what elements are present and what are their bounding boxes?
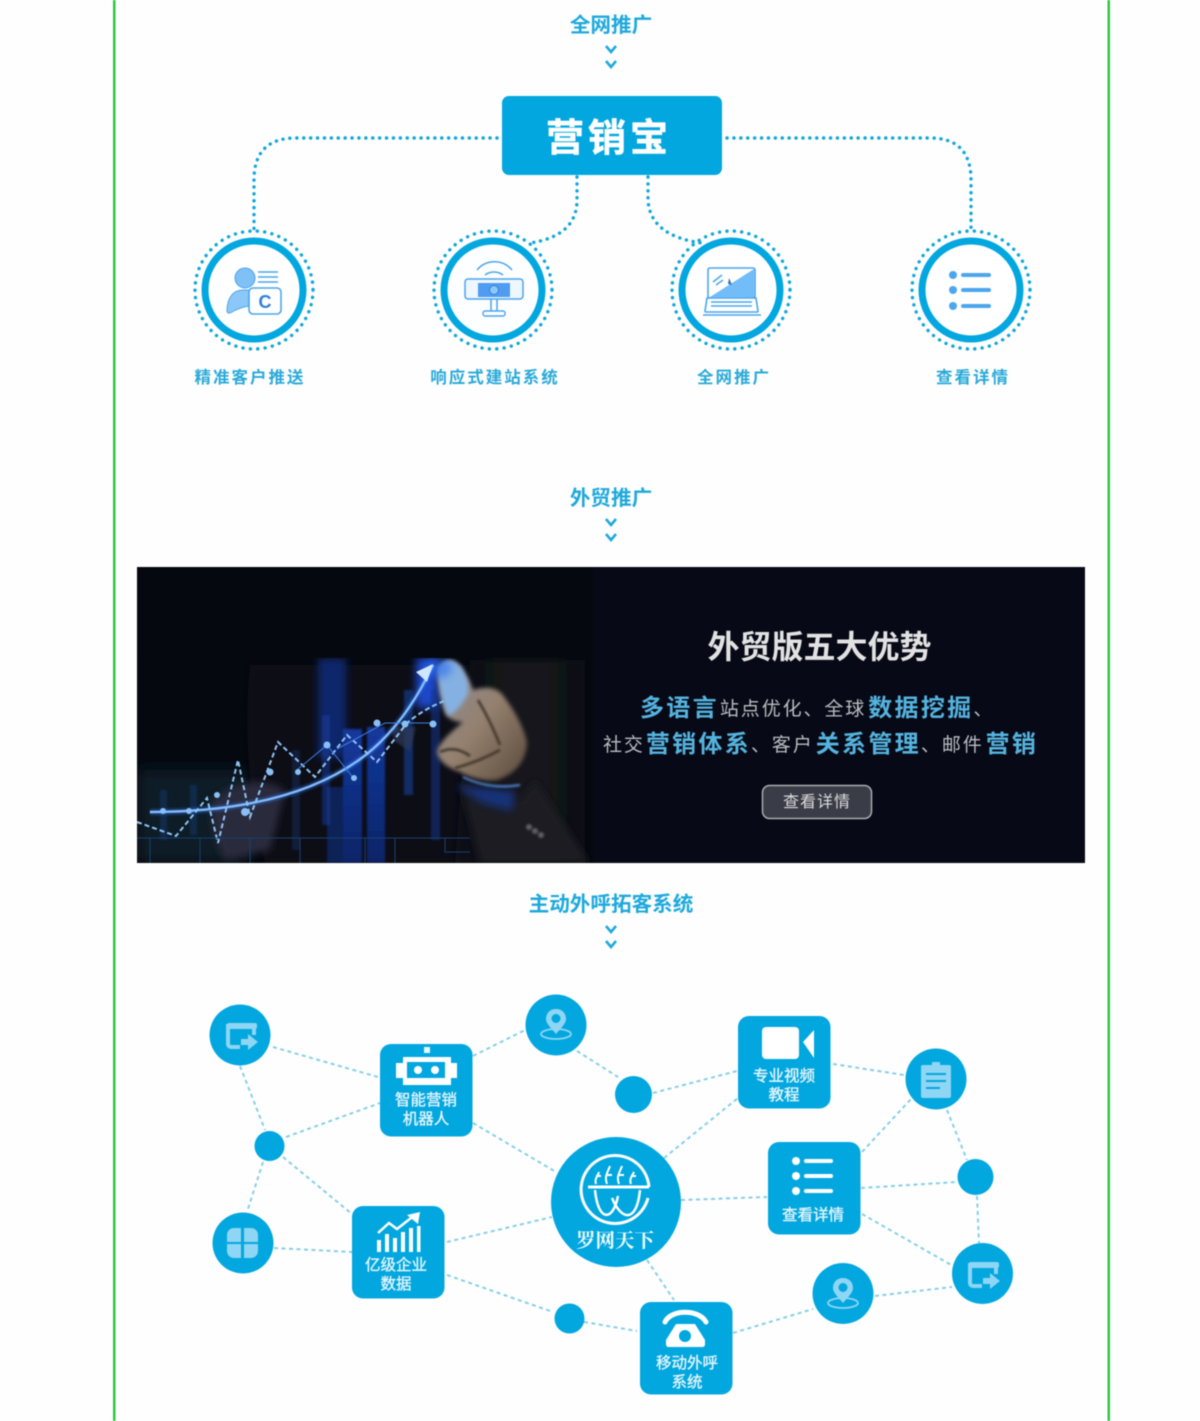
tie and bars [160, 658, 440, 863]
icon: share [969, 1262, 1000, 1289]
banner text line 1: 多语言 [640, 695, 719, 722]
card: 查看详情: 查看详情 [782, 1206, 844, 1224]
connector: to 全网推广 [648, 177, 702, 243]
node: dot left [254, 1131, 284, 1161]
card: 专业视频教程: 教程 [768, 1086, 800, 1104]
icon: growth chart [377, 1212, 420, 1252]
card: 移动外呼系统 [640, 1302, 732, 1394]
icon: location pin [541, 1009, 571, 1039]
node: location circle bottom [812, 1263, 874, 1324]
connector: to 查看详情 [727, 138, 971, 232]
icon: double chevron [606, 46, 616, 67]
banner text line 2: 关系管理 [816, 731, 921, 758]
heading: 全网推广: 全网推广 [570, 13, 652, 37]
box: 营销宝 [502, 96, 722, 175]
node: dot [615, 1076, 652, 1113]
suit [250, 668, 256, 776]
node: 精准客户推送 [195, 231, 313, 349]
heading: 主动外呼拓客系统: 主动外呼拓客系统 [529, 892, 694, 916]
card: 亿级企业数据 [352, 1206, 444, 1298]
banner text line 1: 数据挖掘 [868, 695, 973, 722]
icon: webcam [465, 262, 523, 316]
icon: video camera [762, 1027, 814, 1059]
card: 亿级企业数据: 亿级企业 [365, 1256, 427, 1274]
image: hand drawing growth chart [137, 658, 593, 863]
icon: customer: C [258, 292, 272, 312]
card: 移动外呼系统: 移动外呼 [656, 1354, 718, 1372]
icon: robot [396, 1047, 457, 1085]
second hand [211, 782, 285, 860]
pointing hand [437, 660, 527, 780]
panel: 外贸版五大优势 banner [137, 567, 1085, 863]
node: share circle top-left [210, 1004, 270, 1066]
icon: list [792, 1157, 833, 1195]
icon: location pin [828, 1278, 858, 1308]
icon: clipboard [921, 1062, 951, 1098]
icon: double chevron [606, 519, 616, 540]
connector: to 响应式建站系统 [530, 177, 577, 243]
card: 查看详情 [768, 1142, 860, 1234]
network: dashed links [240, 1030, 979, 1333]
node: share circle right [952, 1243, 1013, 1304]
card: 亿级企业数据: 数据 [380, 1275, 412, 1293]
connector: to 精准客户推送 [254, 138, 497, 232]
banner text line 2: 营销体系 [646, 731, 751, 758]
card: 智能营销机器人 [380, 1044, 472, 1136]
page frame: left green rule [113, 0, 116, 1421]
page frame: right green rule [1108, 0, 1110, 1421]
banner text line 2: 、客户 [751, 734, 814, 756]
icon: share [227, 1023, 258, 1050]
icon: laptop [703, 268, 761, 315]
node: clover circle [212, 1212, 274, 1274]
node: clipboard circle [906, 1048, 966, 1110]
node: dot bottom [554, 1304, 584, 1334]
icon: list [949, 271, 991, 310]
banner text line 2: 社交 [603, 734, 645, 756]
heading: 外贸推广: 外贸推广 [570, 487, 652, 510]
node: 全网推广 [672, 231, 790, 349]
label: 响应式建站系统: 响应式建站系统 [430, 367, 560, 387]
button: 查看详情 [762, 786, 872, 818]
card: 智能营销机器人: 智能营销 [395, 1091, 457, 1109]
icon: globe logo [581, 1155, 649, 1223]
node: location circle top [526, 994, 586, 1056]
box: 营销宝: 营销宝 [546, 118, 672, 160]
banner title: 外贸版五大优势 [707, 629, 932, 665]
banner text line 1: 站点优化、全球 [720, 698, 866, 720]
cuff and sleeve glow [455, 785, 515, 811]
icon: clover [227, 1228, 258, 1258]
button: 查看详情: 查看详情 [783, 793, 851, 811]
node: 罗网天下 hub [551, 1137, 681, 1267]
jacket buttons [526, 824, 544, 838]
card: 专业视频教程: 专业视频 [753, 1067, 815, 1085]
growth curve [150, 665, 433, 812]
node: dot right [958, 1159, 994, 1195]
banner text line 1: 、 [973, 699, 994, 720]
node: 查看详情 [912, 231, 1030, 349]
banner text line 2: 营销 [986, 731, 1038, 758]
label: 查看详情: 查看详情 [936, 367, 1010, 387]
card: 智能营销机器人: 机器人 [403, 1110, 449, 1128]
label: 精准客户推送: 精准客户推送 [194, 367, 306, 387]
label: 全网推广: 全网推广 [697, 367, 771, 387]
icon: double chevron [606, 926, 616, 947]
banner text line 2: 、邮件 [921, 734, 984, 756]
hub label: 罗网天下 [576, 1230, 654, 1252]
icon: telephone [665, 1312, 706, 1347]
card: 专业视频教程 [738, 1016, 830, 1108]
card: 移动外呼系统: 系统 [671, 1373, 703, 1391]
node: 响应式建站系统 [434, 231, 552, 349]
